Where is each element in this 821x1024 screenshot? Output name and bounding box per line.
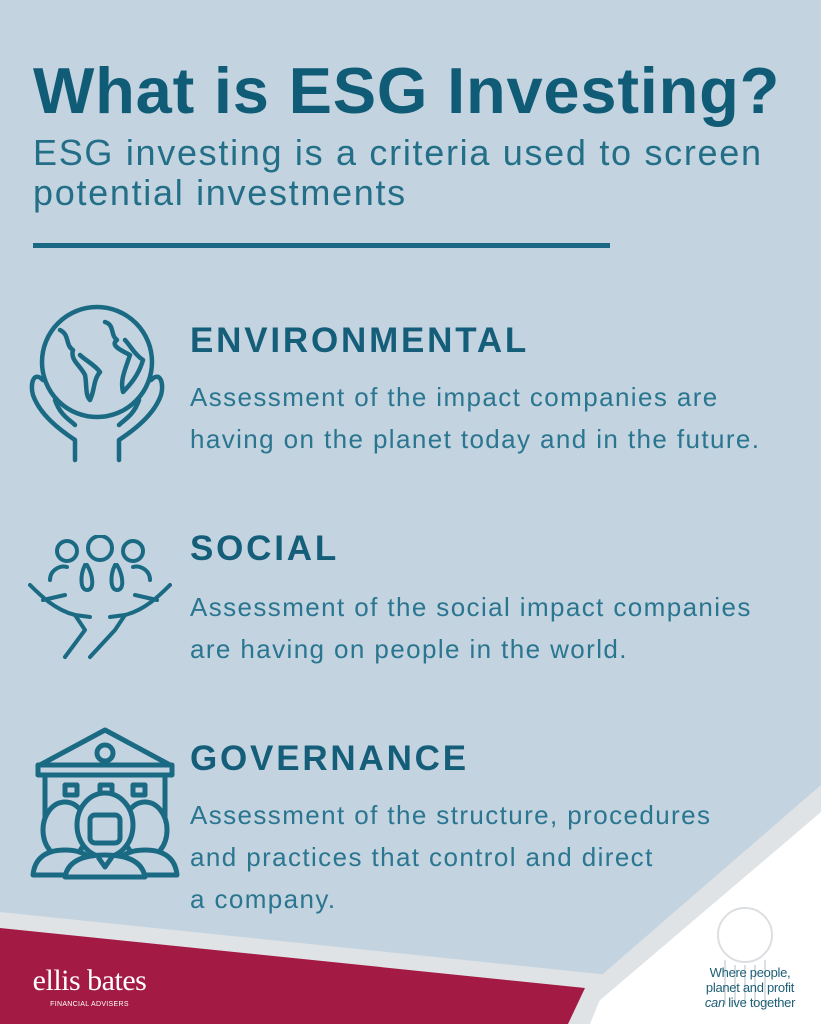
text: governance: a company. <box>190 884 336 914</box>
heading: social: SOCIAL <box>190 529 339 568</box>
subtitle: ESG investing is a criteria used to screen <box>33 132 763 173</box>
text: environmental <box>190 382 760 454</box>
logo: ellis bates: ellis bates <box>33 964 146 997</box>
tagline with faint globe: can live together <box>705 995 795 1010</box>
text: governance: Assessment of the structure, procedures <box>190 800 711 830</box>
icon: globe in hands <box>30 304 164 462</box>
text: social: Assessment of the social impact companies <box>190 592 752 622</box>
icon: people in hands <box>28 535 172 660</box>
tagline with faint globe: Where people, <box>710 965 790 980</box>
text: governance: and practices that control and direct <box>190 842 654 872</box>
logo: ellis bates: FINANCIAL ADVISERS <box>50 1001 129 1008</box>
tagline with faint globe <box>705 907 796 1010</box>
subtitle <box>33 132 763 213</box>
heading: environmental: ENVIRONMENTAL <box>190 321 529 360</box>
text: environmental: Assessment of the impact companies are <box>190 382 719 412</box>
icon: governance building with people <box>30 728 180 880</box>
text: environmental: having on the planet today and in the future. <box>190 424 760 454</box>
text: social <box>190 592 752 664</box>
title: What is ESG Investing? <box>33 54 780 127</box>
heading: governance: GOVERNANCE <box>190 739 469 778</box>
text: governance <box>190 800 711 914</box>
tagline with faint globe: planet and profit <box>706 980 794 995</box>
text: social: are having on people in the world. <box>190 634 628 664</box>
subtitle: potential investments <box>33 172 407 213</box>
